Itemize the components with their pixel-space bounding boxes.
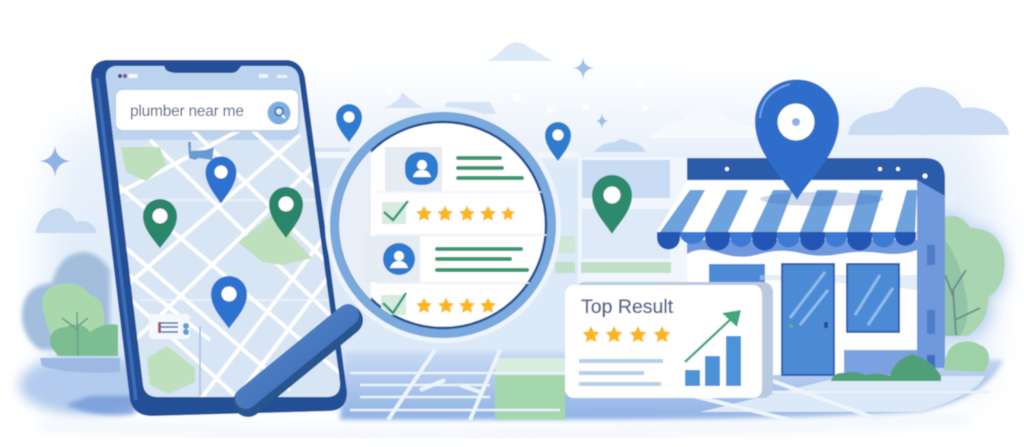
handle (246, 315, 348, 402)
clouds and sparkles (35, 42, 1009, 233)
store wall (687, 240, 917, 375)
map pin: green middle (592, 175, 632, 234)
ground and streets under store (40, 350, 1003, 434)
review row 1 check and stars (382, 201, 515, 224)
map mini card (149, 314, 190, 339)
store roof (687, 158, 945, 196)
divider (375, 192, 560, 283)
map pin dot (344, 112, 354, 122)
street map backdrop (300, 148, 688, 287)
icon: small dog marker (188, 142, 214, 160)
map pin dot (278, 196, 294, 212)
status bar (118, 64, 287, 78)
review row 2 check and stars (381, 293, 496, 315)
map pin: floating left (336, 104, 362, 142)
door (782, 264, 834, 375)
map pin: blue bottom (211, 276, 247, 329)
phone (91, 60, 360, 416)
map pin dot (552, 130, 564, 140)
card text lines (579, 359, 663, 386)
storefront (657, 79, 989, 381)
search bar (115, 89, 299, 131)
trees left (22, 252, 120, 373)
phone screen (105, 65, 341, 398)
review row 1 (385, 147, 524, 191)
icon: search (268, 102, 290, 124)
map pin dot (214, 166, 228, 178)
awning (657, 181, 917, 250)
map pin dot (222, 286, 236, 302)
map pin: blue top (206, 156, 236, 204)
map pin: floating right (545, 122, 571, 161)
ground left (19, 355, 151, 416)
map streets (118, 132, 340, 398)
pin shadow on awning (760, 192, 884, 206)
shrubs (831, 341, 989, 381)
review row 2 (365, 236, 529, 282)
magnifying glass (246, 107, 561, 402)
window (847, 264, 899, 332)
map parks (121, 147, 166, 181)
lens outer halo (325, 107, 561, 343)
lens face (340, 122, 546, 328)
tree right (935, 212, 1007, 340)
card stars (582, 326, 671, 342)
store location pin (755, 79, 839, 200)
map pin: green right (269, 187, 303, 238)
map pin: green left (143, 199, 177, 248)
map pin dot (152, 208, 168, 224)
search bar: plumber near me (130, 103, 244, 120)
bar chart (685, 336, 741, 386)
phone body (91, 60, 347, 416)
top result card (565, 282, 773, 398)
arrow: growth trend (685, 310, 741, 362)
phone pointer line (199, 326, 201, 396)
right wall (917, 180, 945, 368)
card heading: Top Result (581, 296, 674, 318)
map pin dot (604, 186, 620, 204)
lens ring (330, 112, 556, 338)
